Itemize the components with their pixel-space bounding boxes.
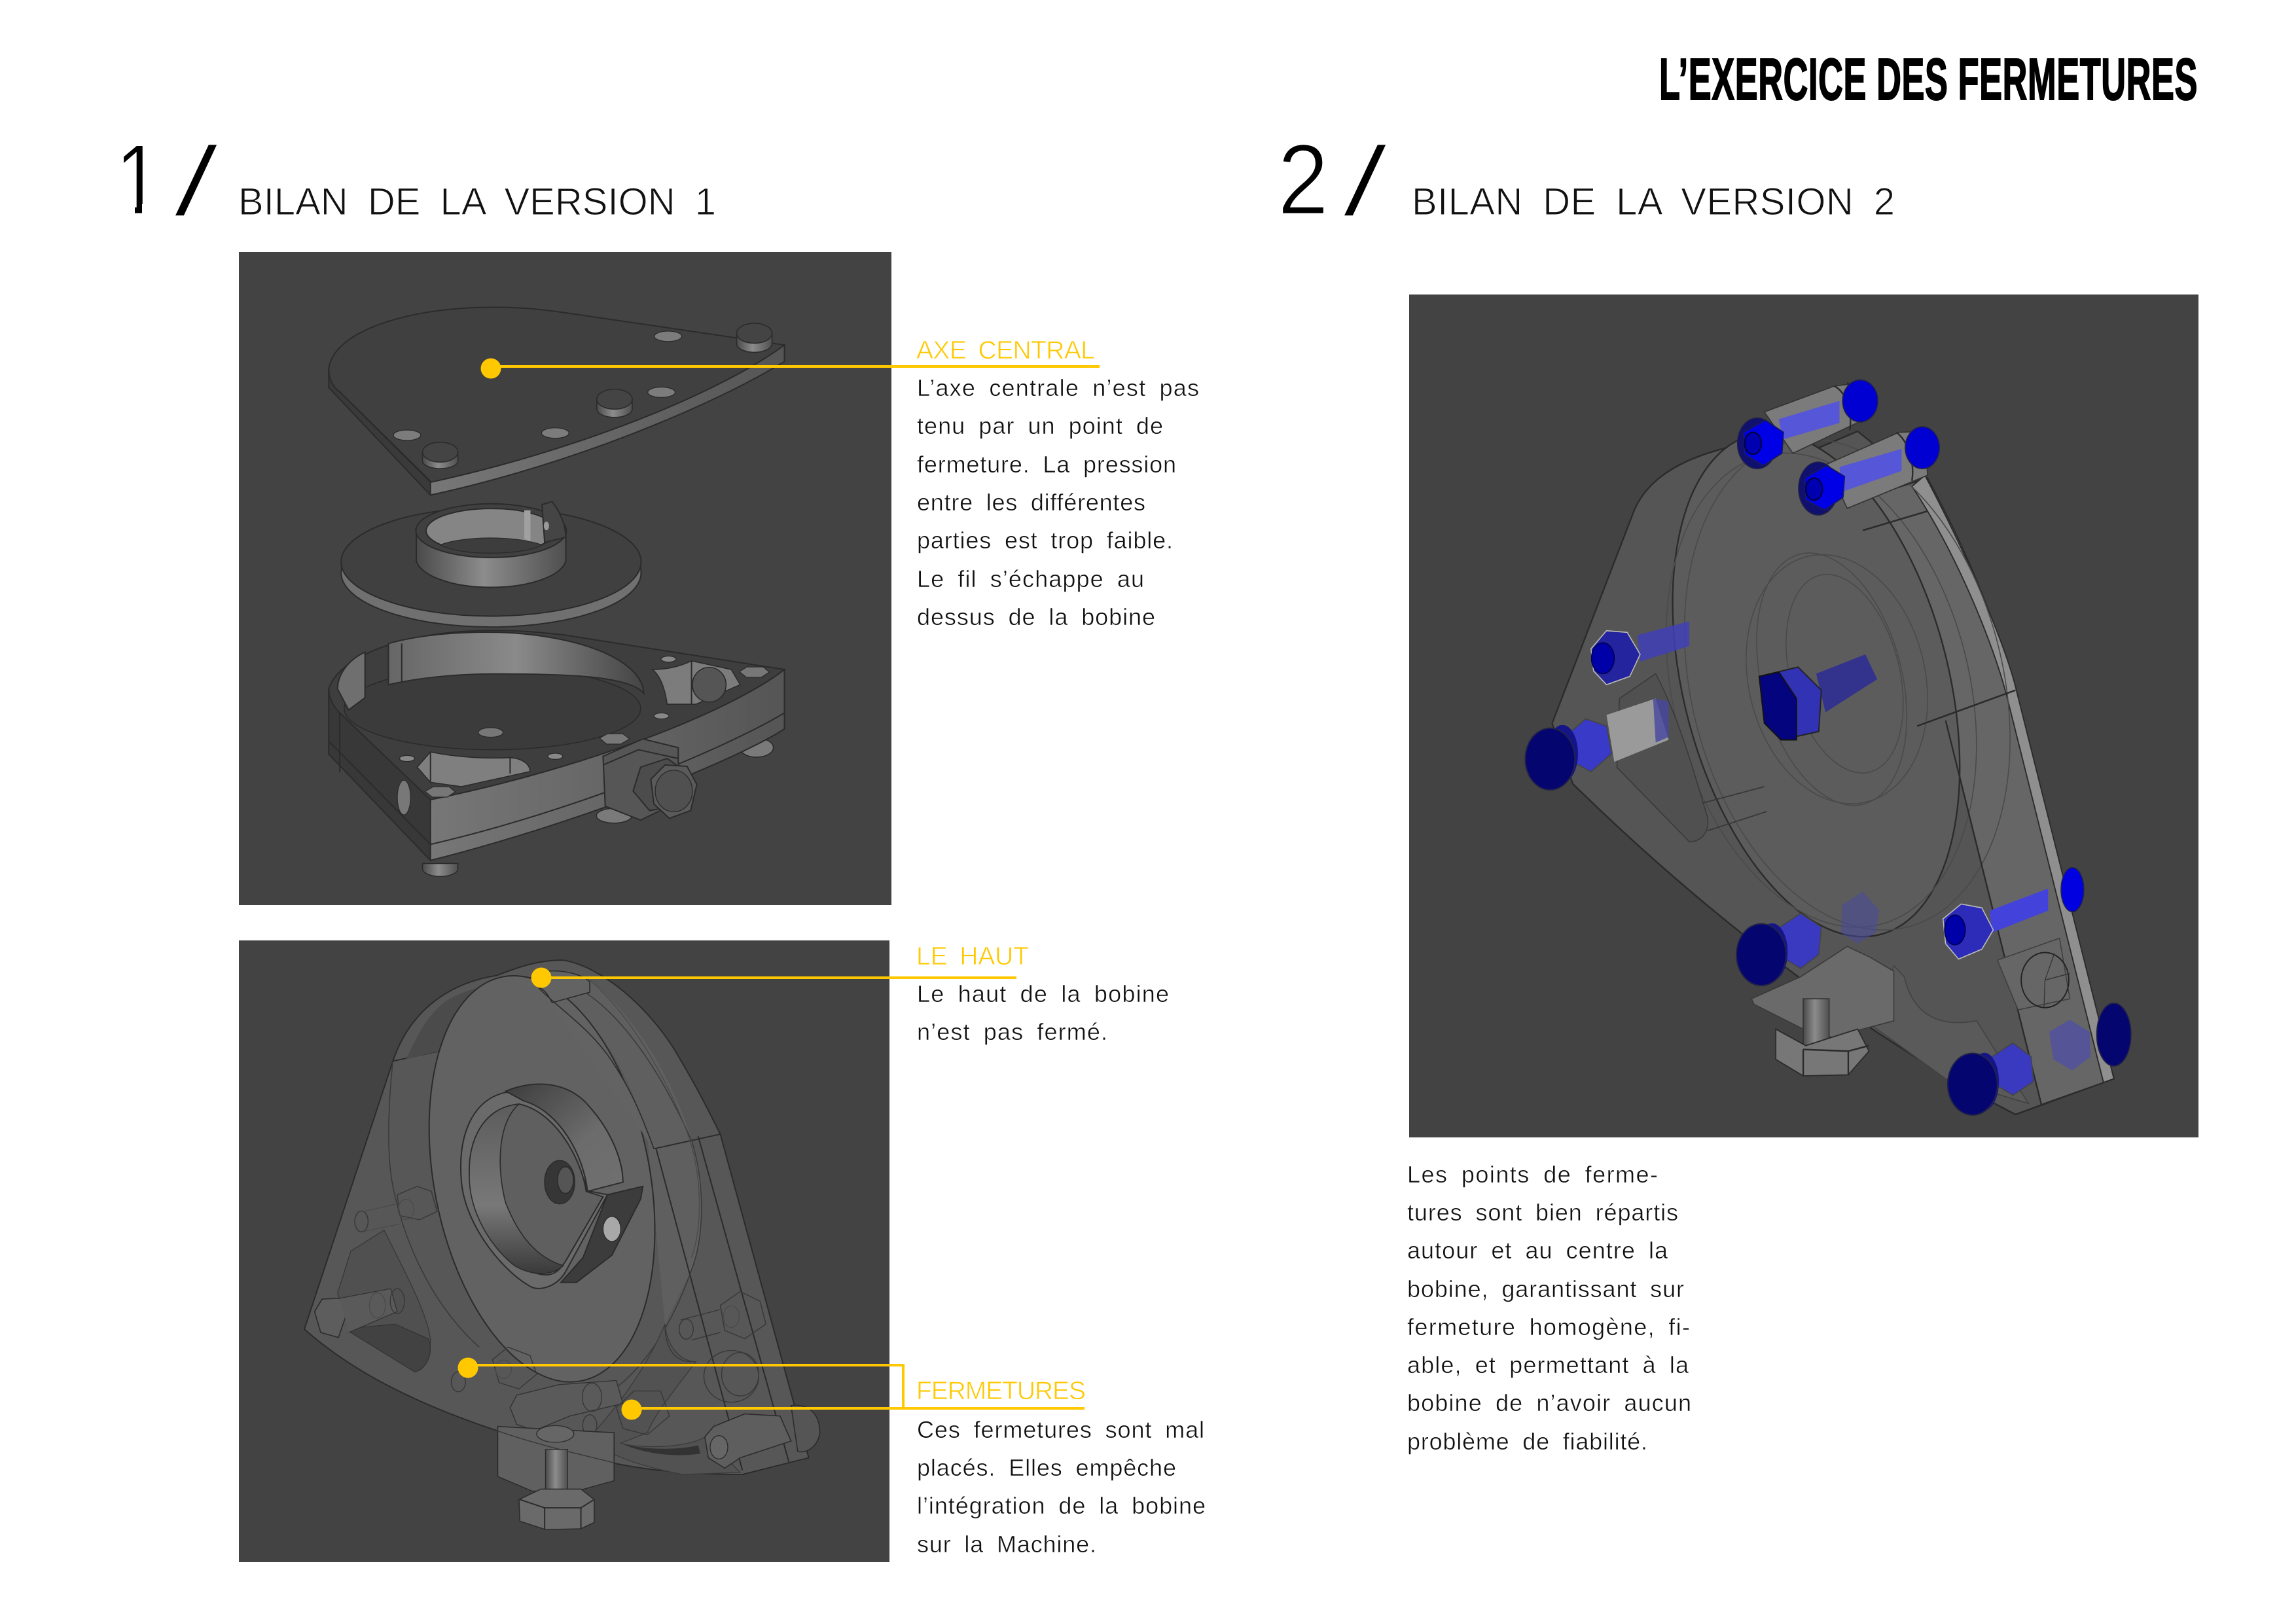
text block: version 2 assessment: tures sont bien répartis — [1407, 1199, 1678, 1226]
label: LE HAUT — [916, 942, 1029, 971]
text block: version 2 assessment: fermeture homogène, fi- — [1407, 1313, 1690, 1340]
bobbin disk — [1623, 397, 2010, 972]
description: l’intégration de la bobine — [917, 1492, 1206, 1519]
text block: version 2 assessment: bobine, garantissant sur — [1407, 1275, 1684, 1302]
blue bolt: top right — [1799, 427, 1939, 515]
leader line and dot — [480, 359, 1100, 378]
description: parties est trop faible. — [917, 527, 1173, 554]
text block: version 2 assessment: autour et au centre la — [1407, 1237, 1668, 1264]
section number 2: 2 — [1278, 124, 1329, 236]
slash 1: / — [172, 125, 220, 238]
section number 1: 1 — [115, 124, 161, 236]
label: AXE CENTRAL — [916, 336, 1095, 365]
description: Le haut de la bobine — [917, 980, 1169, 1007]
text block: version 2 assessment: able, et permettant à la — [1407, 1351, 1689, 1378]
text block: version 2 assessment: problème de fiabilité. — [1407, 1428, 1647, 1455]
heading text 1: BILAN DE LA VERSION 1 — [238, 181, 716, 223]
leader line and dot — [531, 967, 1016, 988]
description: Ces fermetures sont mal — [917, 1416, 1204, 1443]
central clip ring — [461, 1084, 643, 1289]
description: placés. Elles empêche — [917, 1454, 1176, 1481]
bottom housing — [329, 630, 785, 876]
side bolt and nut — [603, 739, 697, 820]
heading: section 1 — [115, 124, 716, 238]
translucent housing v2 — [1552, 431, 2114, 1115]
foot v2 — [1751, 946, 1894, 1076]
heading text 2: BILAN DE LA VERSION 2 — [1412, 181, 1895, 223]
text block: version 2 assessment: bobine de n’avoir aucun — [1407, 1389, 1691, 1416]
panel: exploded view version 1 — [239, 252, 891, 905]
inner housing lines — [338, 976, 789, 1474]
description: L’axe centrale n’est pas — [917, 374, 1199, 401]
heading: section 2 — [1278, 124, 1895, 238]
description: fermeture. La pression — [917, 451, 1176, 478]
foot with bolt and nut — [497, 1425, 614, 1529]
description: entre les différentes — [917, 489, 1145, 516]
blue bolt: top left — [1738, 380, 1878, 469]
callout: axe central — [480, 336, 1199, 630]
top slot on disk — [532, 971, 654, 1149]
description — [917, 980, 1169, 1045]
description: sur la Machine. — [917, 1531, 1096, 1558]
slash 2: / — [1341, 125, 1389, 238]
bracket leader lines and dots — [458, 1357, 1085, 1420]
description: n’est pas fermé. — [917, 1018, 1107, 1045]
text block: version 2 assessment: Les points de ferme- — [1407, 1161, 1658, 1188]
middle disk with ring — [341, 501, 641, 627]
text block: version 2 assessment — [1407, 1161, 1691, 1455]
callout: fermetures — [458, 1357, 1206, 1558]
label: FERMETURES — [916, 1377, 1086, 1405]
lighter front plate edge — [1912, 475, 2114, 1082]
ghosted closure bolts — [315, 1186, 820, 1468]
description — [917, 374, 1199, 630]
description — [917, 1416, 1206, 1558]
description: Le fil s’échappe au — [917, 565, 1144, 592]
blue bolt: left lower with cap — [1525, 698, 1668, 790]
front plate — [1850, 478, 2104, 1105]
panel: transparent view version 2 — [1409, 294, 2198, 1137]
wound disk — [398, 959, 686, 1399]
blue bolt: left upper — [1591, 621, 1689, 685]
blue bolt: central — [1759, 654, 1877, 740]
description: dessus de la bobine — [917, 603, 1155, 630]
description: tenu par un point de — [917, 412, 1163, 439]
blue bolt: bottom left with cap — [1736, 891, 1879, 986]
callout: le haut — [531, 942, 1169, 1045]
blue bolt: right — [1943, 868, 2084, 959]
translucent housing — [304, 960, 809, 1474]
panel: transparent view version 1 — [239, 940, 889, 1562]
ghost disk and ring outlines — [1617, 398, 2070, 1105]
top plate — [329, 307, 785, 495]
blue bolt: bottom right with caps — [1948, 1003, 2131, 1115]
